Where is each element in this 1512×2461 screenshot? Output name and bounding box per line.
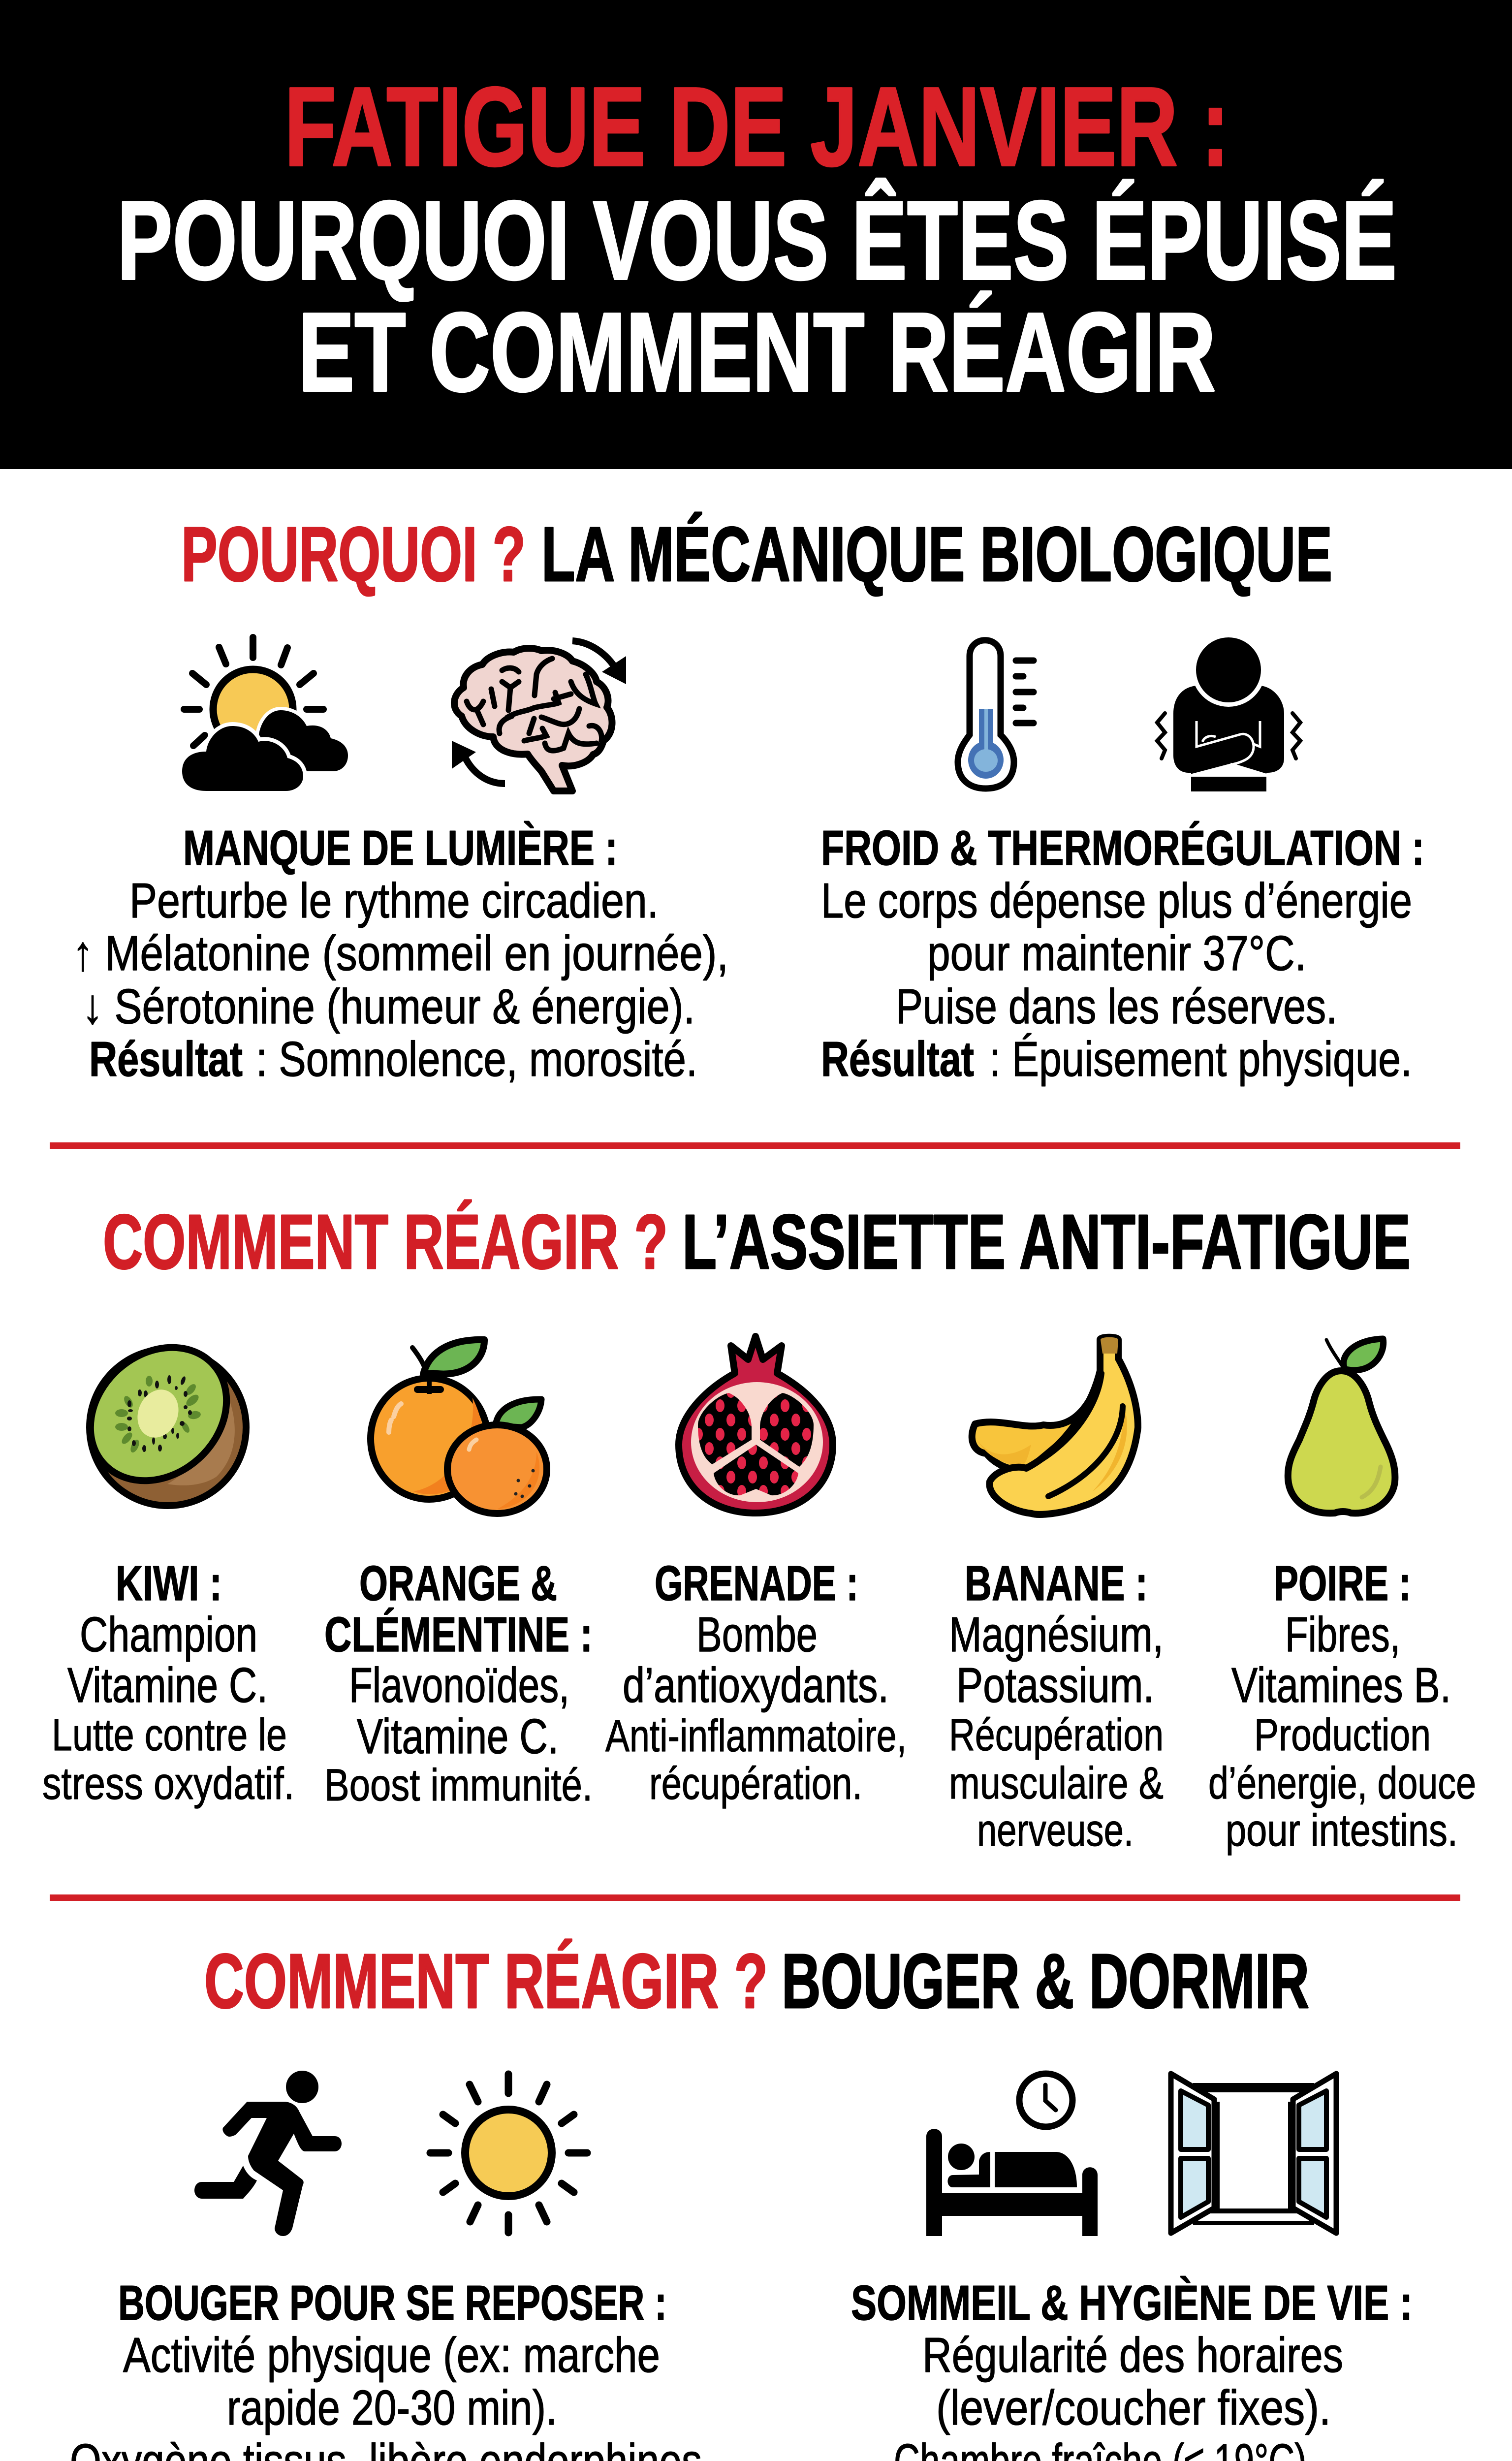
section heading: assiette: COMMENT RÉAGIR ? bbox=[103, 1199, 668, 1285]
text: grenade: Bombe bbox=[696, 1607, 818, 1662]
text: kiwi bbox=[42, 1556, 294, 1809]
text: bouger pour se reposer bbox=[70, 2275, 713, 2461]
text: poire bbox=[1208, 1556, 1476, 1856]
text: poire: Vitamines B. bbox=[1231, 1658, 1451, 1713]
header banner bbox=[0, 0, 1512, 469]
icon: thermometer bbox=[958, 640, 1034, 789]
text: bouger pour se reposer: rapide 20-30 min). bbox=[227, 2380, 557, 2435]
text: grenade: récupération. bbox=[649, 1759, 862, 1809]
text: poire: POIRE : bbox=[1274, 1556, 1411, 1611]
text: grenade: GRENADE : bbox=[655, 1556, 858, 1611]
section heading: pourquoi bbox=[181, 511, 1332, 598]
text: banane bbox=[949, 1556, 1164, 1856]
text: sommeil et hygiene de vie: Régularité des horaires bbox=[922, 2328, 1343, 2383]
text: grenade: d’antioxydants. bbox=[623, 1658, 889, 1713]
section heading: bouger et dormir: BOUGER & DORMIR bbox=[782, 1938, 1309, 2024]
text: orange et clementine: CLÉMENTINE : bbox=[324, 1607, 593, 1662]
text: froid et thermoregulation: Puise dans les réserves. bbox=[896, 979, 1337, 1034]
text: poire: Production bbox=[1254, 1710, 1431, 1760]
text: bouger pour se reposer: BOUGER POUR SE REPOSER : bbox=[118, 2275, 667, 2331]
text: manque de lumiere: ↓ Sérotonine (humeur & énergie). bbox=[82, 979, 695, 1034]
icon: pear bbox=[1288, 1339, 1395, 1513]
text: orange et clementine: ORANGE & bbox=[359, 1556, 557, 1611]
title: ET COMMENT RÉAGIR bbox=[298, 290, 1216, 415]
icon: runner bbox=[194, 2071, 342, 2236]
text: kiwi: Champion bbox=[80, 1607, 257, 1662]
text: poire: Fibres, bbox=[1285, 1607, 1400, 1662]
text: poire: pour intestins. bbox=[1226, 1805, 1458, 1856]
text: bouger pour se reposer: Activité physique (ex: marche bbox=[123, 2328, 660, 2383]
icon: kiwi bbox=[63, 1320, 253, 1508]
text: kiwi: Lutte contre le bbox=[52, 1710, 287, 1760]
section heading: assiette bbox=[103, 1199, 1411, 1285]
text: manque de lumiere: MANQUE DE LUMIÈRE : bbox=[183, 820, 618, 876]
title bbox=[117, 64, 1397, 415]
text: manque de lumiere bbox=[72, 820, 728, 1087]
text: orange et clementine bbox=[324, 1556, 593, 1810]
icon: sun bbox=[430, 2074, 587, 2233]
section heading: bouger et dormir: COMMENT RÉAGIR ? bbox=[204, 1938, 768, 2024]
icon: bed with sleeper and clock bbox=[926, 2074, 1098, 2236]
text: sommeil et hygiene de vie bbox=[822, 2275, 1441, 2461]
title: FATIGUE DE JANVIER : bbox=[284, 64, 1229, 189]
text: froid et thermoregulation: pour maintenir 37°C. bbox=[927, 926, 1306, 981]
icon: brain with cycle arrows bbox=[452, 641, 626, 791]
icon: bananas bbox=[972, 1337, 1138, 1514]
icon: orange and clementine bbox=[371, 1340, 547, 1514]
text: froid et thermoregulation: Le corps dépense plus d’énergie bbox=[821, 873, 1412, 928]
icon: open window bbox=[1171, 2074, 1336, 2233]
text: grenade bbox=[605, 1556, 907, 1809]
text: kiwi: stress oxydatif. bbox=[42, 1759, 294, 1809]
text: banane: BANANE : bbox=[965, 1556, 1148, 1611]
text: banane: Récupération bbox=[949, 1710, 1164, 1760]
text: froid et thermoregulation bbox=[821, 820, 1424, 1087]
text: banane: Magnésium, bbox=[949, 1607, 1164, 1662]
text: grenade: Anti-inflammatoire, bbox=[605, 1711, 907, 1761]
icon: shivering person bbox=[1157, 633, 1300, 791]
text: kiwi: Vitamine C. bbox=[67, 1658, 268, 1713]
text: banane: Potassium. bbox=[956, 1658, 1154, 1713]
text: banane: nerveuse. bbox=[977, 1805, 1134, 1856]
text: manque de lumiere: : Somnolence, morosité. bbox=[256, 1032, 697, 1087]
text: orange et clementine: Vitamine C. bbox=[357, 1709, 559, 1764]
text: manque de lumiere: ↑ Mélatonine (sommeil en journée), bbox=[72, 926, 728, 981]
section heading: pourquoi: POURQUOI ? bbox=[181, 511, 526, 598]
text: orange et clementine: Boost immunité. bbox=[324, 1760, 593, 1810]
text: manque de lumiere: Résultat bbox=[89, 1032, 243, 1087]
text: kiwi: KIWI : bbox=[116, 1556, 222, 1611]
text: manque de lumiere: Perturbe le rythme circadien. bbox=[129, 873, 659, 928]
text: froid et thermoregulation: Résultat bbox=[821, 1032, 974, 1087]
icon: pomegranate bbox=[679, 1336, 833, 1513]
text: froid et thermoregulation: : Épuisement physique. bbox=[989, 1032, 1412, 1087]
text: banane: musculaire & bbox=[949, 1758, 1164, 1808]
text: orange et clementine: Flavonoïdes, bbox=[349, 1658, 569, 1713]
icon: sun behind clouds bbox=[182, 637, 348, 791]
text: sommeil et hygiene de vie: (lever/coucher fixes). bbox=[936, 2380, 1331, 2435]
